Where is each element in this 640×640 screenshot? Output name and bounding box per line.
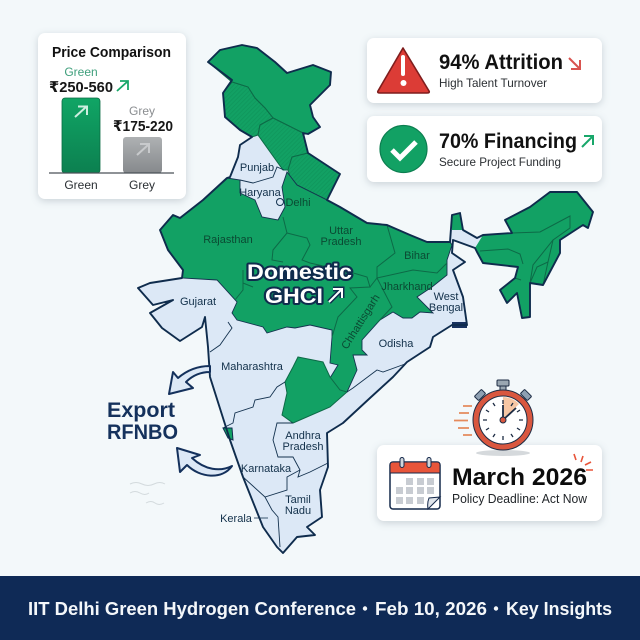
land base — [138, 45, 593, 553]
arrow: lower export — [177, 448, 232, 476]
grey value label — [113, 104, 173, 135]
green: Rajasthan, Uttar Pradesh, Madhya Pradesh, Bihar, Jharkhand, Chhattisgarh — [160, 172, 452, 392]
bar: green — [62, 98, 100, 173]
axis labels — [64, 178, 155, 192]
green: Jammu Kashmir and Ladakh — [208, 45, 331, 134]
icon: check circle — [380, 126, 427, 172]
arrow: upper export — [169, 366, 210, 394]
map of India — [138, 45, 593, 553]
state labels: Delhi — [285, 197, 311, 209]
state labels: Nadu — [285, 505, 311, 517]
state borders — [210, 167, 570, 547]
state labels: Tamil — [285, 494, 311, 506]
footer banner: Feb 10, 2026 — [375, 599, 487, 619]
state labels: Pradesh — [283, 441, 323, 453]
green: Sikkim — [452, 213, 463, 230]
state labels — [180, 162, 463, 525]
icon: down arrow — [569, 58, 580, 69]
panel: march 2026 deadline — [377, 445, 602, 521]
green: Goa — [223, 428, 233, 440]
state labels: Rajasthan — [203, 234, 253, 246]
text: policy deadline: Policy Deadline: Act Now — [452, 491, 588, 506]
icon: warning triangle — [378, 48, 429, 93]
icon: calendar — [390, 458, 440, 509]
state labels: Gujarat — [180, 296, 216, 308]
axis labels: Grey — [129, 178, 155, 192]
state labels: Karnataka — [241, 463, 292, 475]
footer banner: IIT Delhi Green Hydrogen Conference — [28, 599, 356, 619]
state labels: Bihar — [404, 250, 430, 262]
state labels: Maharashtra — [221, 361, 284, 373]
icon: up arrow — [582, 136, 593, 147]
text: 70% financing: 70% Financing — [439, 130, 577, 153]
state labels: Chhattisgarh — [339, 292, 383, 352]
footer banner — [0, 576, 640, 640]
state labels: Andhra — [285, 430, 322, 442]
grey value label: ₹175-220 — [113, 118, 173, 135]
state labels: Uttar — [329, 225, 353, 237]
text: 94% attrition: 94% Attrition — [439, 51, 563, 74]
export RFNBO label and arrows — [107, 366, 232, 476]
heading: Domestic GHCI: Domestic — [247, 261, 352, 284]
export RFNBO label and arrows: Export — [107, 399, 175, 422]
green value label — [49, 65, 128, 96]
green: northern hill state — [258, 118, 308, 170]
panel: price comparison — [38, 33, 186, 199]
sea waves — [130, 482, 165, 504]
green: north-east states — [475, 192, 593, 318]
axis labels: Green — [64, 178, 98, 192]
icon: spark rays — [574, 454, 593, 470]
state labels: Kerala — [220, 513, 253, 525]
text: high talent turnover: High Talent Turnover — [439, 76, 547, 90]
green: Uttarakhand — [288, 153, 340, 200]
green value label: ₹250-560 — [49, 79, 113, 96]
text: secure project funding: Secure Project Funding — [439, 155, 561, 169]
state labels: Haryana — [239, 187, 282, 199]
coast outline — [138, 45, 593, 553]
green value label: Green — [64, 65, 98, 79]
green: Himachal Pradesh — [223, 82, 273, 137]
state labels: Jharkhand — [381, 281, 433, 293]
panel: financing — [367, 116, 602, 182]
panel: attrition — [367, 38, 602, 103]
state labels: Bengal — [429, 302, 463, 314]
bar: grey — [123, 137, 162, 173]
green: Telangana — [282, 357, 347, 423]
footer banner: Key Insights — [506, 599, 612, 619]
icon: stopwatch — [454, 380, 533, 456]
export RFNBO label and arrows: RFNBO — [107, 421, 178, 444]
heading: price comparison: Price Comparison — [52, 44, 171, 61]
text: march 2026: March 2026 — [452, 464, 587, 491]
state labels: West — [434, 291, 458, 303]
state labels: Pradesh — [321, 236, 361, 248]
state labels: Punjab — [240, 162, 274, 174]
state labels: Odisha — [379, 338, 414, 350]
heading: Domestic GHCI — [247, 261, 352, 308]
grey value label: Grey — [129, 104, 155, 118]
heading: Domestic GHCI: GHCI — [265, 285, 323, 308]
